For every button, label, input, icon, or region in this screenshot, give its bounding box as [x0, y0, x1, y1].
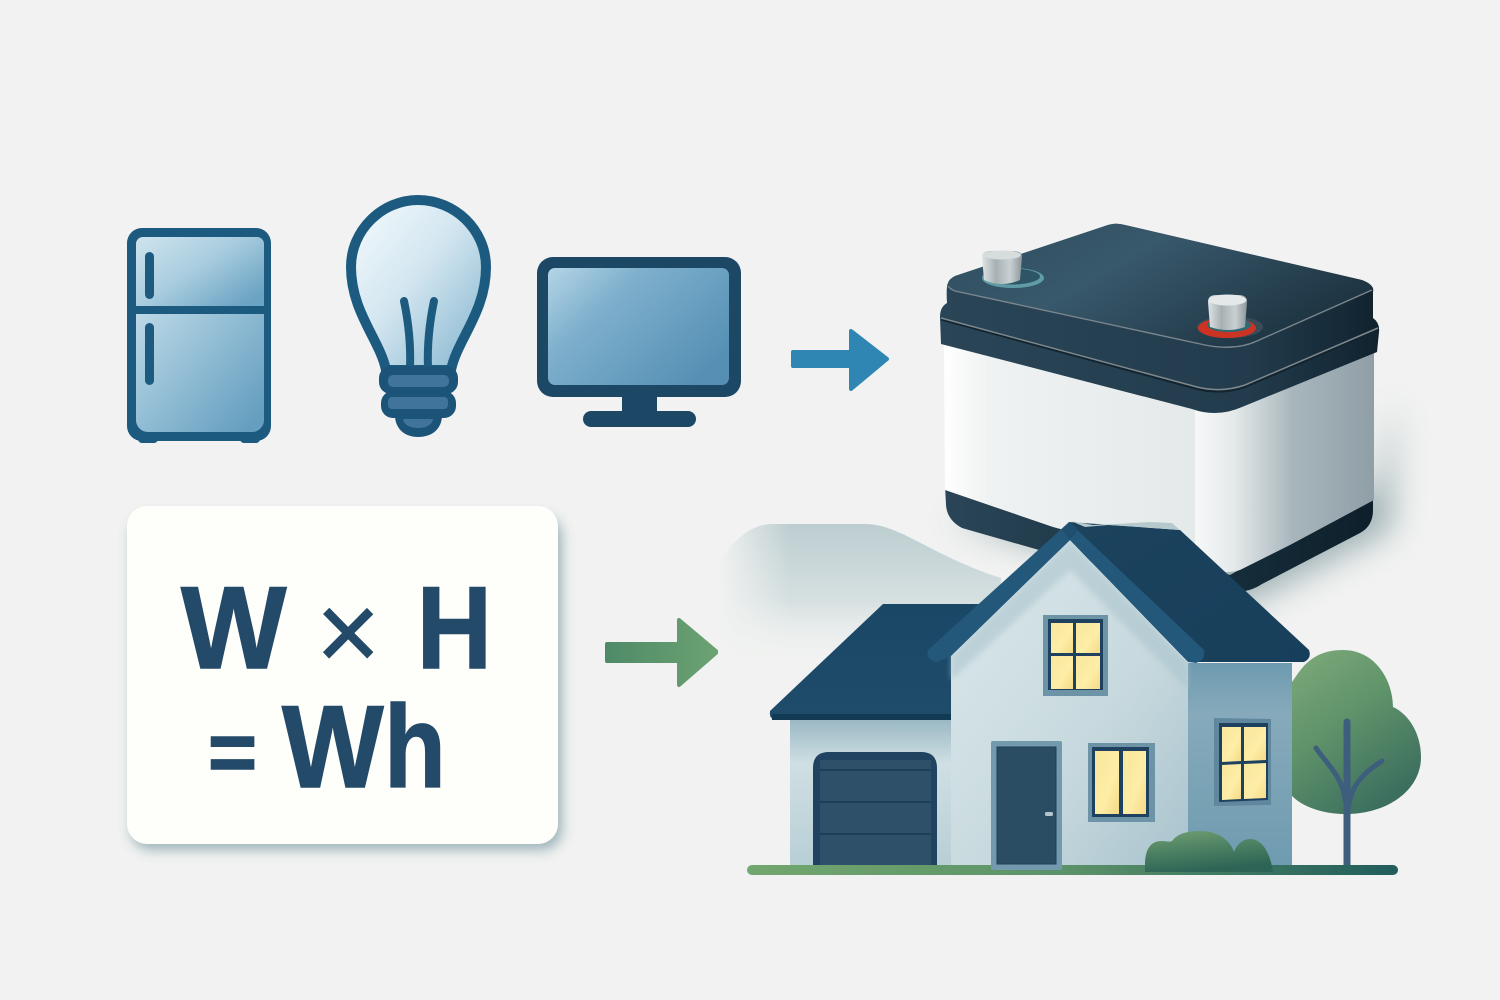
side wall	[1188, 663, 1292, 865]
front wall	[951, 540, 1188, 865]
upper window	[1043, 615, 1108, 696]
battery body right face	[1195, 340, 1374, 572]
formula text: = Wh: W	[282, 681, 384, 812]
battery lid groove	[941, 320, 1378, 392]
formula text: W × H: H	[417, 563, 492, 693]
main roof right slope	[1069, 522, 1310, 662]
icon: refrigerator	[127, 228, 271, 443]
scene: house	[718, 521, 1421, 875]
battery bottom band	[945, 485, 1373, 592]
terminal: negative	[982, 250, 1044, 288]
battery body left face	[944, 340, 1197, 566]
terminal: positive	[1197, 294, 1263, 338]
lower window	[1088, 743, 1155, 822]
garage wall	[790, 720, 951, 865]
background hill	[720, 524, 1001, 665]
bush	[1145, 831, 1273, 872]
battery lid top	[948, 224, 1372, 347]
ground	[747, 865, 1398, 875]
arrow: formula to house	[607, 620, 717, 685]
roof highlight	[1071, 521, 1180, 530]
side window	[1214, 718, 1271, 806]
icon: monitor	[537, 257, 741, 427]
garage roof	[770, 604, 985, 719]
battery lid side	[940, 224, 1379, 413]
formula text: W × H: W	[181, 563, 286, 694]
card: formula	[127, 506, 562, 850]
tree crown	[1285, 650, 1421, 814]
icon: light bulb	[351, 200, 486, 437]
formula text: = Wh	[208, 681, 446, 813]
door	[991, 741, 1062, 870]
icon: battery	[940, 224, 1395, 608]
formula text: W × H: ×	[316, 571, 380, 694]
formula text: = Wh: h	[384, 682, 446, 813]
formula text: W × H	[181, 563, 492, 694]
gable fascia	[927, 522, 1204, 663]
tree trunk	[1316, 722, 1382, 866]
battery shadow	[950, 400, 1395, 608]
formula text: = Wh: =	[208, 705, 257, 799]
arrow: devices to battery	[793, 331, 887, 389]
garage door	[813, 752, 937, 865]
